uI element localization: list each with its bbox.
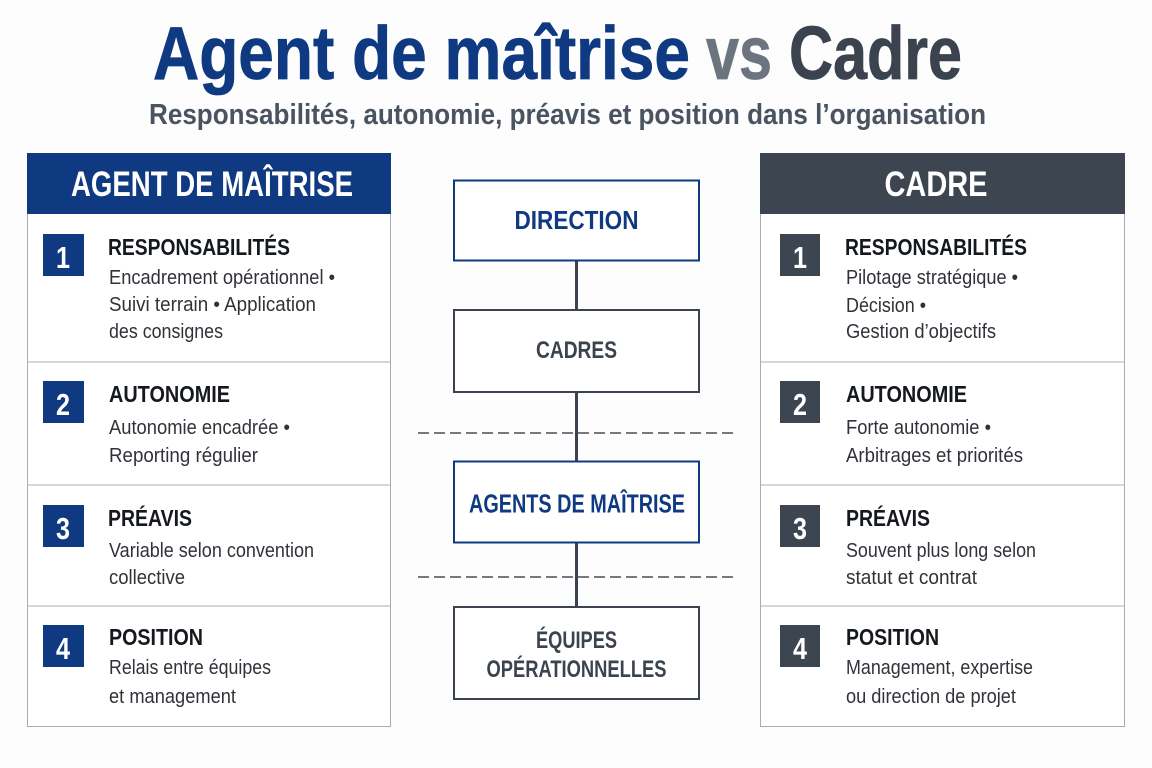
row: responsabilités: 1 [56, 240, 70, 275]
box: direction: DIRECTION [514, 205, 638, 235]
row: préavis [43, 504, 314, 589]
box: cadres: CADRES [536, 337, 617, 364]
row: responsabilités: Décision • [846, 295, 926, 317]
row: responsabilités [780, 233, 1027, 343]
row: préavis [780, 504, 1036, 589]
row: autonomie: 2 [793, 387, 807, 422]
row: position: POSITION [109, 624, 203, 650]
row: responsabilités: Pilotage stratégique • [846, 267, 1018, 289]
box: direction [454, 180, 699, 260]
row: position: ou direction de projet [846, 686, 1016, 708]
title: Cadre [789, 11, 962, 95]
box: cadres [454, 310, 699, 392]
row: autonomie: 2 [56, 387, 70, 422]
row: autonomie: AUTONOMIE [846, 381, 967, 407]
row: préavis: PRÉAVIS [108, 504, 192, 531]
row: position [780, 624, 1033, 708]
title: vs [706, 11, 772, 95]
row: responsabilités: Suivi terrain • Application [109, 294, 316, 316]
box: équipes opérationnelles: OPÉRATIONNELLES [486, 655, 666, 683]
connectors between levels [575, 261, 578, 607]
panel: cadre [760, 153, 1125, 726]
panel header: agent de maîtrise: AGENT DE MAÎTRISE [71, 164, 353, 204]
panel: agent de maîtrise [27, 153, 391, 726]
row: préavis: 3 [56, 511, 70, 546]
row: autonomie [780, 381, 1023, 467]
row: préavis: Variable selon convention [109, 540, 314, 562]
row: responsabilités: des consignes [109, 321, 223, 343]
panel header: cadre [760, 153, 1125, 214]
row: position: POSITION [846, 624, 939, 650]
row: préavis: statut et contrat [846, 567, 977, 589]
row: responsabilités: Gestion d’objectifs [846, 321, 996, 343]
box: agents de maîtrise [454, 462, 699, 542]
row: responsabilités: Encadrement opérationnel • [109, 267, 335, 289]
row: responsabilités: RESPONSABILITÉS [845, 233, 1027, 260]
row: préavis: 3 [793, 511, 807, 546]
row: autonomie [43, 381, 290, 467]
title: Agent de maîtrise [153, 11, 690, 95]
panel header: agent de maîtrise [27, 153, 391, 214]
row: responsabilités [43, 233, 335, 343]
box: équipes opérationnelles [454, 607, 699, 699]
row: position: et management [109, 686, 236, 708]
row: position: 4 [56, 631, 71, 666]
panel header: cadre: CADRE [884, 165, 988, 204]
row: position: 4 [793, 631, 808, 666]
row: autonomie: AUTONOMIE [109, 381, 230, 407]
row: responsabilités: 1 [793, 240, 807, 275]
row: position: Relais entre équipes [109, 657, 271, 679]
box: équipes opérationnelles: ÉQUIPES [536, 626, 617, 654]
row: préavis: PRÉAVIS [846, 504, 930, 531]
box: agents de maîtrise: AGENTS DE MAÎTRISE [469, 488, 685, 518]
row: autonomie: Reporting régulier [109, 445, 258, 467]
row: préavis: collective [109, 567, 185, 589]
row: préavis: Souvent plus long selon [846, 540, 1036, 562]
subtitle: Responsabilités, autonomie, préavis et position dans l’organisation [149, 99, 986, 131]
row: position [43, 624, 271, 708]
row: autonomie: Forte autonomie • [846, 417, 991, 439]
row: responsabilités: RESPONSABILITÉS [108, 233, 290, 260]
row: position: Management, expertise [846, 657, 1033, 679]
row: autonomie: Arbitrages et priorités [846, 445, 1023, 467]
row: autonomie: Autonomie encadrée • [109, 417, 290, 439]
hierarchy diagram [418, 180, 733, 699]
